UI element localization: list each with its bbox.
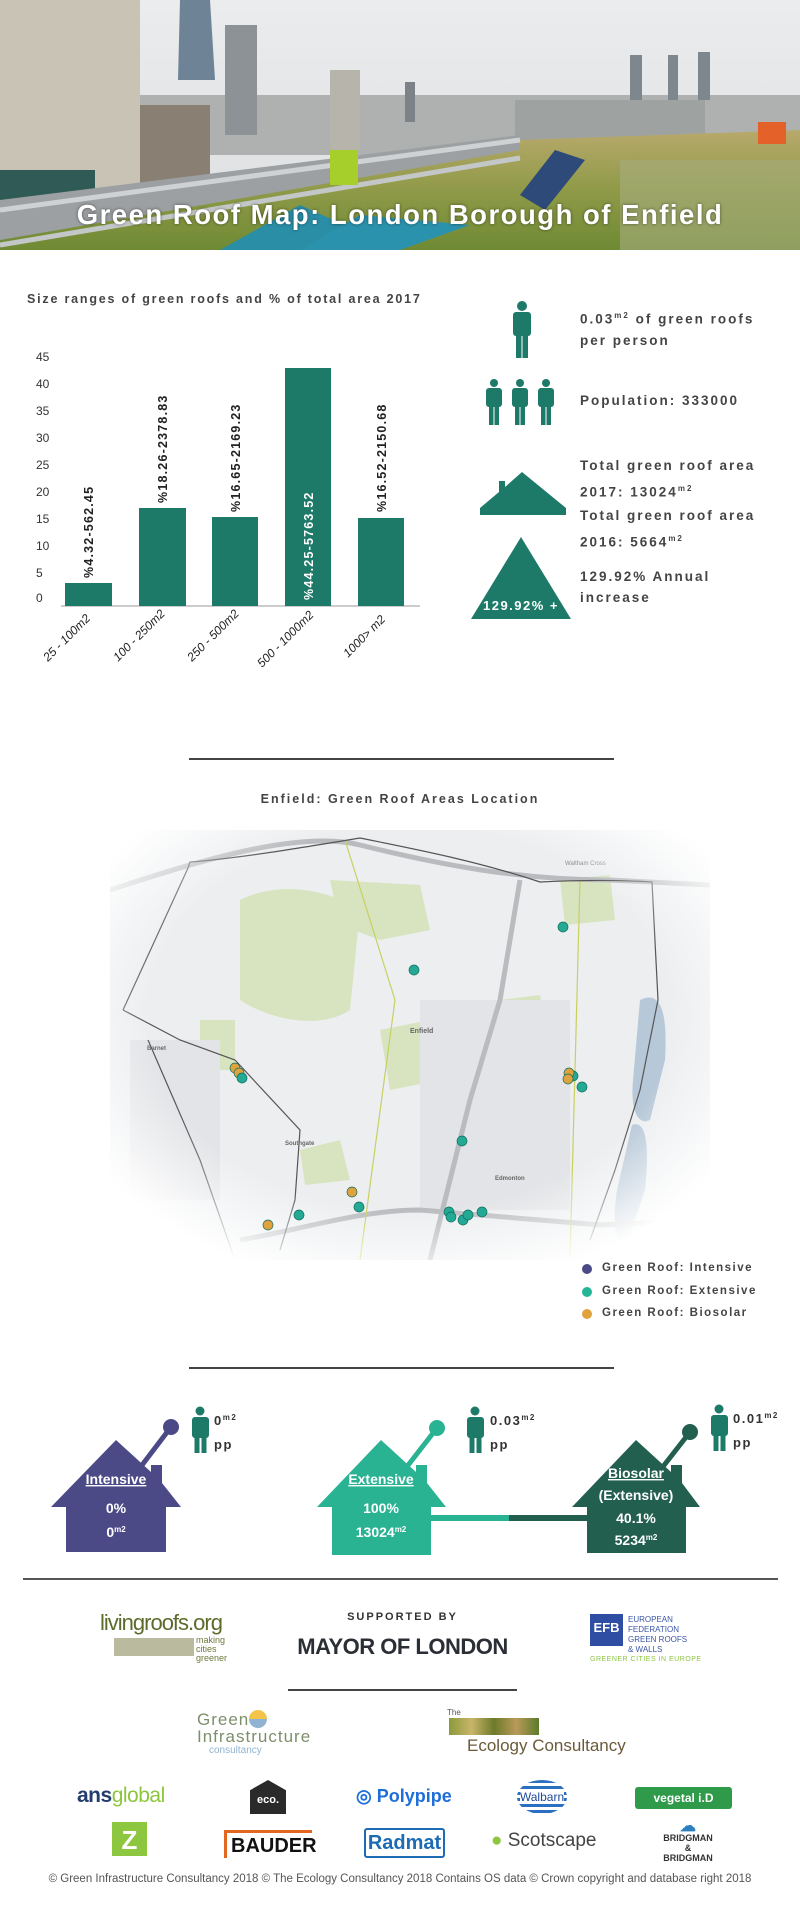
logo: livingroofs: greener <box>196 1653 227 1663</box>
stat: total area <box>580 458 755 549</box>
stat: total area: 2017: 13024m2 <box>580 484 693 500</box>
stat: total area: Total green roof area <box>580 458 755 473</box>
house: biosolar: 5234 <box>615 1532 646 1548</box>
bar chart: 1000> m2 <box>340 612 388 660</box>
sponsor logos row 2: Z <box>122 1825 137 1855</box>
bar chart: %44.25-5763.52 <box>302 491 316 600</box>
bar chart: %18.26-2378.83 <box>156 394 170 503</box>
logo: green infrastructure: Green <box>197 1710 249 1729</box>
stat: population: Population: 333000 <box>580 393 739 408</box>
sponsor logos row 2 <box>112 1818 713 1863</box>
house: biosolar: 0.01 <box>733 1411 764 1426</box>
house: intensive: m2 <box>223 1413 237 1422</box>
bar chart: %16.65-2169.23 <box>229 403 243 512</box>
map legend: Green Roof: Extensive <box>602 1285 757 1297</box>
stat: annual increase: increase <box>580 590 651 605</box>
icon: house <box>480 472 566 515</box>
house: extensive: 0.03 <box>490 1413 521 1428</box>
chart title: Size ranges of green roofs and % of total area 2017 <box>27 292 422 306</box>
house: extensive: Extensive <box>348 1471 414 1487</box>
supported by: SUPPORTED BY <box>347 1611 458 1623</box>
logo: ecology consultancy: Ecology Consultancy <box>467 1736 626 1755</box>
logo: ecology consultancy: The <box>447 1708 461 1717</box>
house: intensive: 0% <box>106 1500 127 1516</box>
title: Green Roof Map: London Borough of Enfield <box>77 199 723 230</box>
logo: livingroofs <box>100 1610 227 1663</box>
logo: EFB: EUROPEAN <box>628 1615 673 1624</box>
stat: total area: 2016: 5664m2 <box>580 534 684 549</box>
bar chart: %16.52-2150.68 <box>375 403 389 512</box>
stat: annual increase <box>580 569 710 605</box>
footer credits: © Green Infrastructure Consultancy 2018 © The Ecology Consultancy 2018 Contains OS data © Crown copyright and database right 2018 <box>49 1873 751 1885</box>
sponsor logos row 2: & BRIDGMAN <box>663 1843 713 1863</box>
sponsor logos row 2: ● Scotscape <box>491 1830 596 1851</box>
bar chart: 40 <box>36 377 50 391</box>
house: extensive: m2 <box>521 1413 536 1422</box>
bar chart: 25 <box>36 458 50 472</box>
bar chart: 10 <box>36 539 50 553</box>
logo: EFB <box>590 1614 702 1663</box>
bar chart: 250 - 500m2 <box>184 606 242 665</box>
logo: EFB: & WALLS <box>628 1645 662 1654</box>
sponsor logos row 1: Walbarn <box>520 1790 564 1804</box>
sponsor logos row 1: ◎ Polypipe <box>356 1786 452 1806</box>
logo: green infrastructure <box>197 1710 311 1756</box>
bar chart <box>36 350 420 670</box>
bar chart: %4.32-562.45 <box>82 486 96 578</box>
mayor of london: MAYOR OF LONDON <box>297 1634 508 1659</box>
logo: green infrastructure: Infrastructure <box>197 1727 311 1746</box>
stat: per person: per person <box>580 332 670 348</box>
map legend: Green Roof: Biosolar <box>602 1307 748 1319</box>
house: biosolar: (Extensive) <box>599 1487 673 1503</box>
bar chart: 500 - 1000m2 <box>254 608 317 670</box>
bar chart: 15 <box>36 512 50 526</box>
bar chart: 30 <box>36 431 50 445</box>
bar chart: 100 - 250m2 <box>110 606 168 664</box>
icon: triangle increase <box>471 537 571 619</box>
house: intensive <box>51 1406 237 1552</box>
logo: EFB: GREENER CITIES IN EUROPE <box>590 1656 702 1663</box>
icon: triangle increase: 129.92% + <box>483 598 559 613</box>
sponsor logos row 2: BRIDGMAN <box>663 1833 713 1843</box>
map: Waltham Cross <box>565 861 606 867</box>
bar chart: 45 <box>36 350 50 364</box>
house: intensive: 0 <box>214 1413 223 1428</box>
bar chart: 5 <box>36 566 43 580</box>
house: extensive: m2 <box>395 1525 407 1534</box>
house: extensive: pp <box>490 1437 509 1452</box>
logo: livingroofs: livingroofs.org <box>100 1610 222 1635</box>
house: intensive: 0 <box>106 1524 114 1540</box>
map: Southgate <box>285 1141 315 1147</box>
sponsor logos row 1: eco. <box>257 1794 279 1806</box>
icon: three persons <box>486 379 554 425</box>
header photo <box>0 0 800 250</box>
logo: EFB: FEDERATION <box>628 1625 679 1634</box>
bar chart: 0 <box>36 591 43 605</box>
stat: per person <box>580 311 754 348</box>
map: Enfield <box>410 1028 433 1035</box>
map: Barnet <box>147 1046 166 1052</box>
house: biosolar: pp <box>733 1435 752 1450</box>
house: extensive <box>317 1406 536 1555</box>
sponsor logos row 1: ansglobal <box>77 1784 165 1807</box>
house: extensive: 100% <box>363 1500 399 1516</box>
logo: green infrastructure: consultancy <box>209 1745 262 1756</box>
logo: EFB: GREEN ROOFS <box>628 1635 687 1644</box>
map: Edmonton <box>495 1176 525 1182</box>
map <box>110 830 710 1260</box>
sponsor logos row 2: ☁ <box>680 1818 696 1835</box>
logo: livingroofs: cities <box>196 1644 217 1654</box>
houses: roof types <box>51 1404 779 1555</box>
house: intensive: pp <box>214 1437 233 1452</box>
house: biosolar: m2 <box>764 1411 779 1420</box>
sponsor logos row 2: Radmat <box>368 1832 441 1854</box>
sponsor logos row 1 <box>77 1780 732 1814</box>
house: biosolar: 40.1% <box>616 1510 656 1526</box>
house: biosolar: m2 <box>646 1533 658 1542</box>
stat: per person: 0.03m2 of green roofs <box>580 311 754 326</box>
logo: ecology consultancy <box>447 1708 626 1755</box>
house: biosolar <box>572 1404 779 1553</box>
bar chart: 25 - 100m2 <box>40 611 93 665</box>
map title: Enfield: Green Roof Areas Location <box>261 792 539 806</box>
house: intensive: m2 <box>114 1525 126 1534</box>
house: biosolar: Biosolar <box>608 1465 665 1481</box>
bar chart: 20 <box>36 485 50 499</box>
icon: person <box>513 301 531 358</box>
bar chart: 35 <box>36 404 50 418</box>
sponsor logos row 1: vegetal i.D <box>653 1791 714 1805</box>
logo: livingroofs: making <box>196 1635 225 1645</box>
connector bar <box>431 1515 509 1521</box>
map legend: Green Roof: Intensive <box>602 1262 753 1274</box>
stat: total area: Total green roof area <box>580 508 755 522</box>
house: extensive: 13024 <box>356 1524 395 1540</box>
sponsor logos row 2: BAUDER <box>231 1835 317 1857</box>
stat: annual increase: 129.92% Annual <box>580 569 710 584</box>
map legend <box>582 1262 757 1319</box>
logo: EFB: EFB <box>594 1620 620 1635</box>
house: intensive: Intensive <box>86 1471 147 1487</box>
